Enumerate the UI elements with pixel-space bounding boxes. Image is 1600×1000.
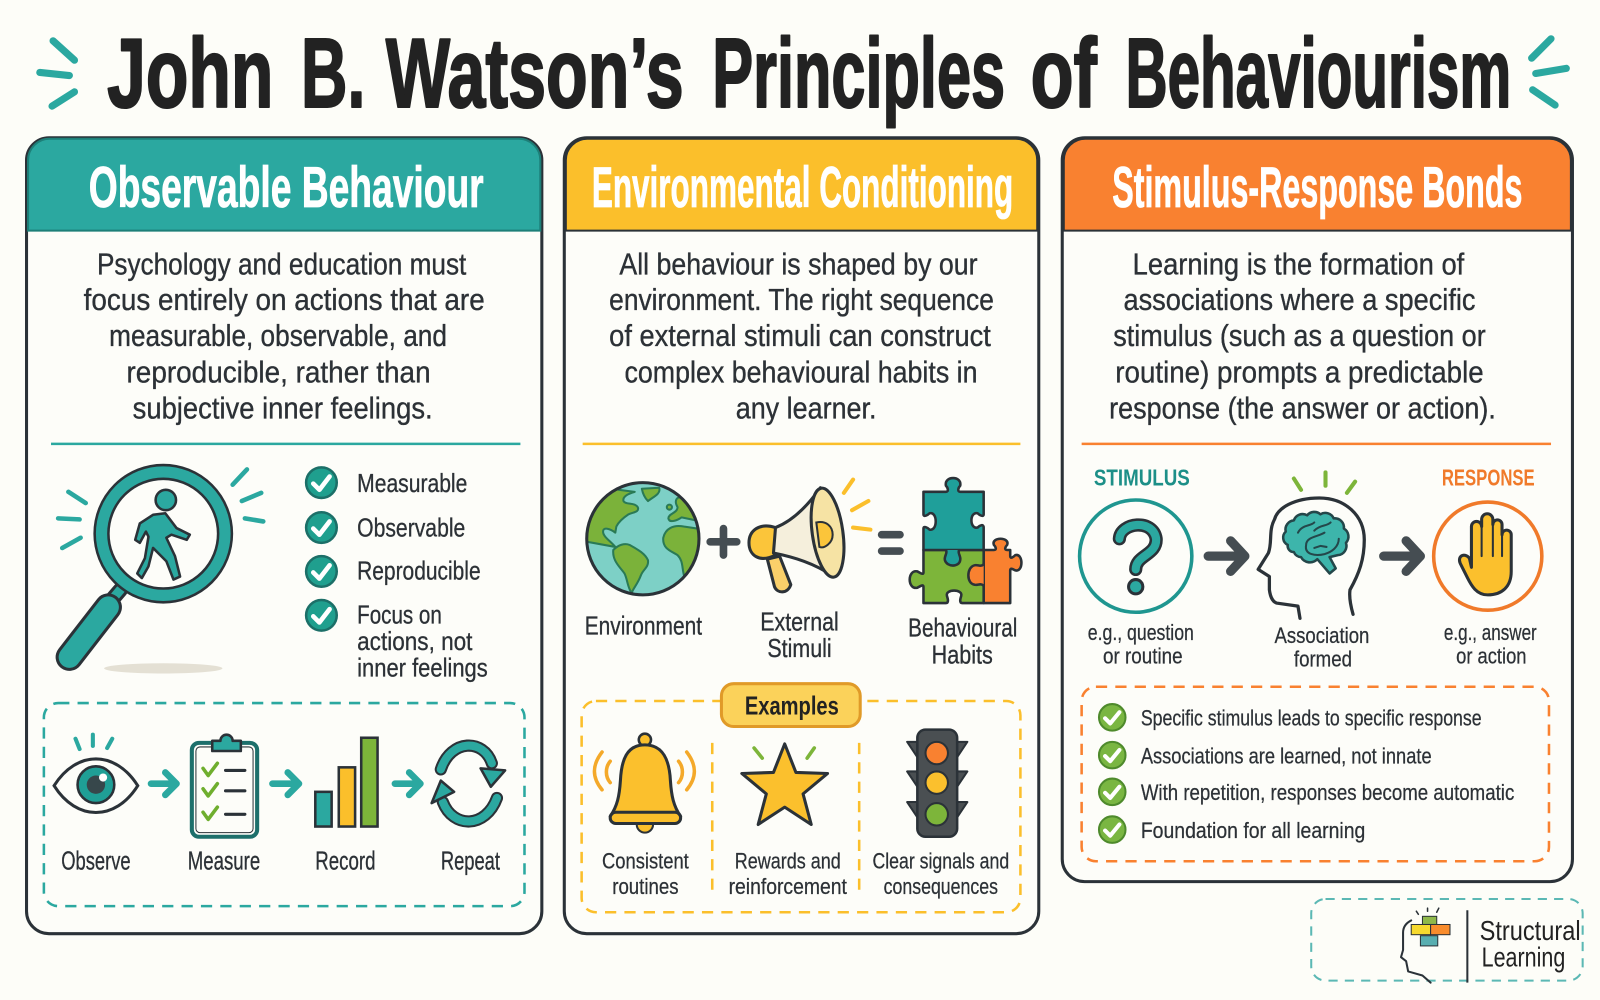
checklist: Reproducible	[357, 558, 481, 586]
equation labels: Habits	[932, 641, 993, 669]
example labels: Consistent	[602, 848, 689, 873]
example labels	[602, 848, 1009, 899]
panel: stimulus-response bonds	[1062, 138, 1572, 882]
icon: bell	[594, 734, 694, 833]
process labels: Record	[315, 847, 376, 875]
arrow	[1208, 541, 1245, 571]
icon: equals	[882, 535, 900, 551]
description text	[1109, 247, 1496, 425]
checklist: actions, not	[357, 628, 472, 656]
heading: Environmental Conditioning	[592, 156, 1013, 220]
flow labels	[1088, 620, 1537, 671]
description text: any learner.	[736, 391, 877, 425]
icon: megaphone	[749, 480, 870, 592]
icon: plus	[710, 529, 737, 555]
arrow	[151, 772, 177, 795]
title: B.	[301, 18, 365, 128]
panel header bar	[1064, 139, 1571, 231]
panel: environmental conditioning	[564, 138, 1039, 934]
key points box: Foundation for all learning	[1141, 818, 1365, 843]
description text: measurable, observable, and	[109, 319, 447, 353]
icon: raised hand in circle	[1434, 502, 1542, 610]
heading: Observable Behaviour	[89, 156, 484, 220]
icon: clipboard	[192, 735, 257, 837]
icon: traffic light	[907, 730, 967, 837]
description text	[84, 247, 485, 425]
icon: star	[742, 744, 828, 824]
title: Principles	[712, 18, 1005, 128]
key points box: Associations are learned, not innate	[1141, 743, 1432, 768]
description text: of external stimuli can construct	[609, 319, 991, 353]
description text: Learning is the formation of	[1133, 247, 1465, 281]
logo text: Learning	[1482, 941, 1565, 972]
title: John	[107, 18, 273, 128]
process labels: Measure	[188, 847, 260, 875]
logo: structural learning	[1311, 899, 1583, 983]
flow labels: formed	[1294, 646, 1352, 671]
description text: focus entirely on actions that are	[84, 283, 485, 317]
equation labels: Behavioural	[908, 615, 1017, 643]
examples box	[582, 684, 1020, 912]
description text: complex behavioural habits in	[624, 356, 978, 390]
process box	[44, 703, 524, 906]
key points box: With repetition, responses become automatic	[1141, 780, 1514, 805]
response label: RESPONSE	[1442, 465, 1535, 491]
arrow	[272, 772, 299, 795]
process labels: Observe	[61, 847, 131, 875]
flow labels: or action	[1456, 643, 1527, 668]
title	[107, 18, 1511, 128]
description text: subjective inner feelings.	[133, 391, 433, 425]
icon: head with blocks	[1401, 908, 1450, 983]
checklist	[306, 467, 488, 683]
icon: left title rays	[40, 41, 74, 106]
title: of	[1031, 18, 1097, 128]
equation labels: Stimuli	[767, 635, 832, 663]
examples badge	[721, 684, 860, 727]
arrow	[395, 772, 420, 795]
example labels: consequences	[884, 874, 998, 899]
icon: question mark in circle	[1080, 500, 1192, 612]
icon: head with brain	[1258, 472, 1364, 618]
flow labels: Association	[1274, 623, 1369, 648]
panel frame	[1062, 138, 1572, 882]
equation labels: Environment	[585, 613, 702, 641]
panel header bar	[28, 139, 540, 231]
description text: environment. The right sequence	[609, 283, 994, 317]
panel frame	[27, 138, 542, 934]
flow labels: e.g., answer	[1444, 620, 1537, 645]
icon: magnifying glass with walking person	[58, 469, 263, 673]
icon: globe	[582, 480, 704, 595]
arrow	[1384, 541, 1420, 571]
stimulus label: STIMULUS	[1094, 465, 1190, 491]
description text: reproducible, rather than	[127, 356, 431, 390]
key points box: Specific stimulus leads to specific response	[1141, 706, 1482, 731]
description text: response (the answer or action).	[1109, 391, 1496, 425]
example labels: routines	[612, 874, 679, 899]
logo text	[1480, 915, 1581, 972]
description text: associations where a specific	[1123, 283, 1476, 317]
flow labels: e.g., question	[1088, 620, 1194, 645]
key points box	[1082, 687, 1549, 861]
icon: puzzle pieces	[910, 478, 1021, 603]
description text: Psychology and education must	[97, 247, 467, 281]
panel: observable behaviour	[27, 138, 542, 934]
description text: All behaviour is shaped by our	[619, 247, 978, 281]
process labels	[61, 847, 500, 875]
example labels: Rewards and	[735, 848, 841, 873]
example labels: Clear signals and	[872, 848, 1009, 873]
description text: routine) prompts a predictable	[1115, 356, 1484, 390]
panel header bar	[566, 139, 1037, 231]
icon: eye	[54, 735, 138, 812]
panel frame	[564, 138, 1039, 934]
equation labels: External	[760, 609, 839, 637]
description text	[609, 247, 994, 425]
process labels: Repeat	[441, 847, 500, 875]
icon: right title rays	[1532, 39, 1566, 105]
examples badge: Examples	[745, 692, 839, 720]
icon: repeat cycle	[432, 746, 505, 821]
checklist: Observable	[357, 515, 465, 543]
icon: bar chart	[315, 738, 378, 827]
example labels: reinforcement	[729, 874, 848, 899]
checklist: Focus on	[357, 601, 442, 629]
title: Watson’s	[386, 18, 684, 128]
checklist: inner feelings	[357, 655, 488, 683]
equation labels	[585, 609, 1017, 669]
flow labels: or routine	[1103, 643, 1183, 668]
logo text: Structural	[1480, 915, 1581, 946]
description text: stimulus (such as a question or	[1113, 319, 1486, 353]
checklist: Measurable	[357, 470, 467, 498]
